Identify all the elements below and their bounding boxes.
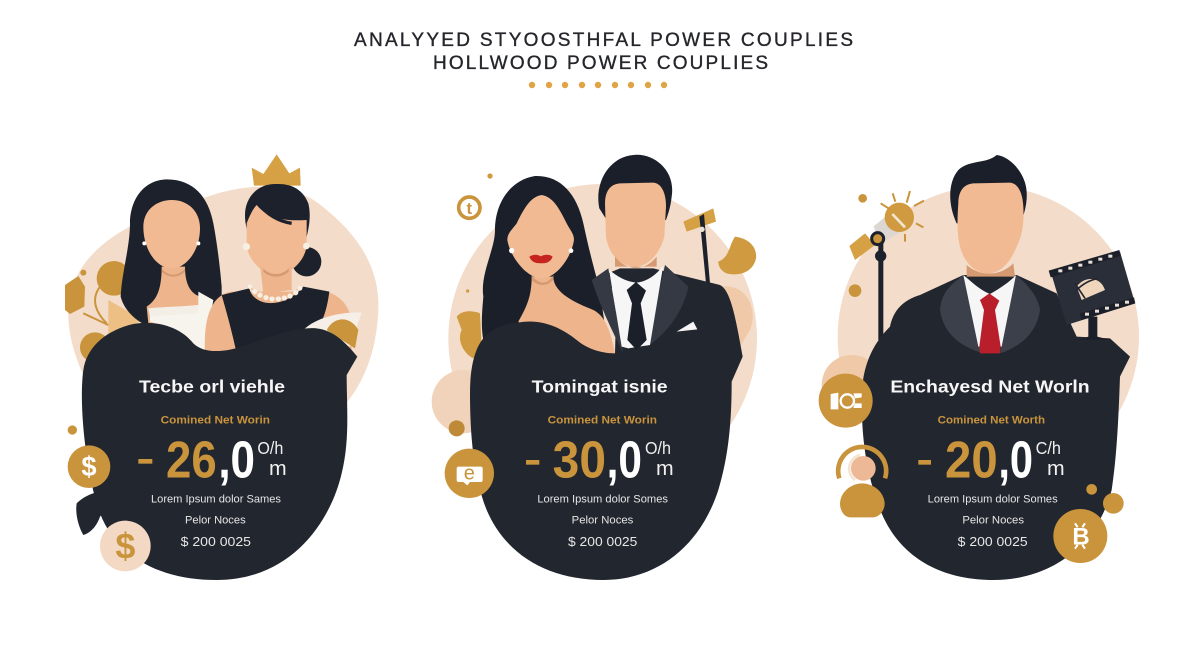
card body text: Pelor Noces [572,514,634,526]
net worth figure: O/h [257,438,283,458]
icon: ring coin: t [467,199,473,218]
card body text: Lorem Ipsum dolor Somes [928,493,1058,505]
title [354,30,853,74]
net worth figure: O/h [645,438,671,458]
peach accent circle [822,355,882,415]
woman with long hair [121,179,222,353]
card body text: Pelor Noces [962,514,1025,526]
icon: peach dollar coin: $ [115,526,135,567]
dark card blob with suit and gown [470,268,743,580]
icon: person with headset ring [838,447,886,517]
icon: gold camera coin [819,374,873,428]
peach background circle [68,187,378,407]
net worth figure: 30 [553,430,606,488]
gold blobs [449,173,756,436]
peach accent circles [432,286,753,433]
net worth label: Comined Net Worth [938,414,1045,426]
icon: film strip on stand [1049,250,1135,340]
icon: gold dollar coin: $ [81,451,97,482]
net worth label: Comined Net Worin [548,414,657,426]
card body text [151,493,281,549]
woman with crown and pearls [205,154,362,353]
card body text: Pelor Noces [185,514,246,526]
icon: gold camera coin: e [464,462,475,484]
net worth figure [526,430,674,488]
icon: microphone on stand [849,191,924,340]
dotted title divider [529,82,667,88]
peach background circle [838,186,1139,487]
gold decorative leaves [65,261,143,362]
dark card blob with suit [862,275,1130,580]
card body text [537,493,668,549]
net worth figure [138,430,287,488]
man in suit [592,155,697,353]
card body text [928,493,1058,549]
net worth figure: m [656,458,674,480]
net worth figure: 26 [166,430,217,488]
net worth figure: ,0 [998,430,1033,488]
panel: single man [819,155,1139,580]
woman in black dress [482,176,615,360]
card heading: Tomingat isnie [532,376,668,396]
panel: couple one [65,154,378,580]
card body text: $ 200 0025 [568,534,637,549]
peach background circle [448,184,757,493]
icon: gavel and stand [683,208,716,283]
icon: gold camera coin [445,449,494,498]
man with red tie [940,155,1040,353]
card body text: $ 200 0025 [181,534,251,549]
net worth figure: ,0 [218,430,255,488]
card heading: Tecbe orl viehle [139,376,285,396]
net worth figure: C/h [1036,438,1061,458]
icon: dark leaf shape [76,491,122,535]
title: ANALYYED STYOOSTHFAL POWER COUPLIES [354,30,853,51]
net worth figure: ,0 [607,430,642,488]
icon: ring coin [459,197,480,218]
icon: bitcoin coin and dots [1053,484,1124,563]
card body text: $ 200 0025 [958,534,1028,549]
title: HOLLWOOD POWER COUPLIES [433,53,768,74]
icon: gold dollar coin [68,425,110,488]
net worth figure [918,430,1065,488]
icon: bitcoin coin and dots: B [1072,524,1090,551]
dark card blob [82,323,357,580]
net worth figure: 20 [945,430,998,488]
net worth figure: m [269,458,287,480]
net worth label: Comined Net Worin [161,414,270,426]
icon: peach dollar coin [100,521,151,571]
card body text: Lorem Ipsum dolor Sames [151,493,281,505]
card body text: Lorem Ipsum dolor Somes [537,493,668,505]
net worth figure: m [1047,458,1065,480]
panel: couple two [432,155,757,580]
card heading: Enchayesd Net Worln [890,376,1090,396]
